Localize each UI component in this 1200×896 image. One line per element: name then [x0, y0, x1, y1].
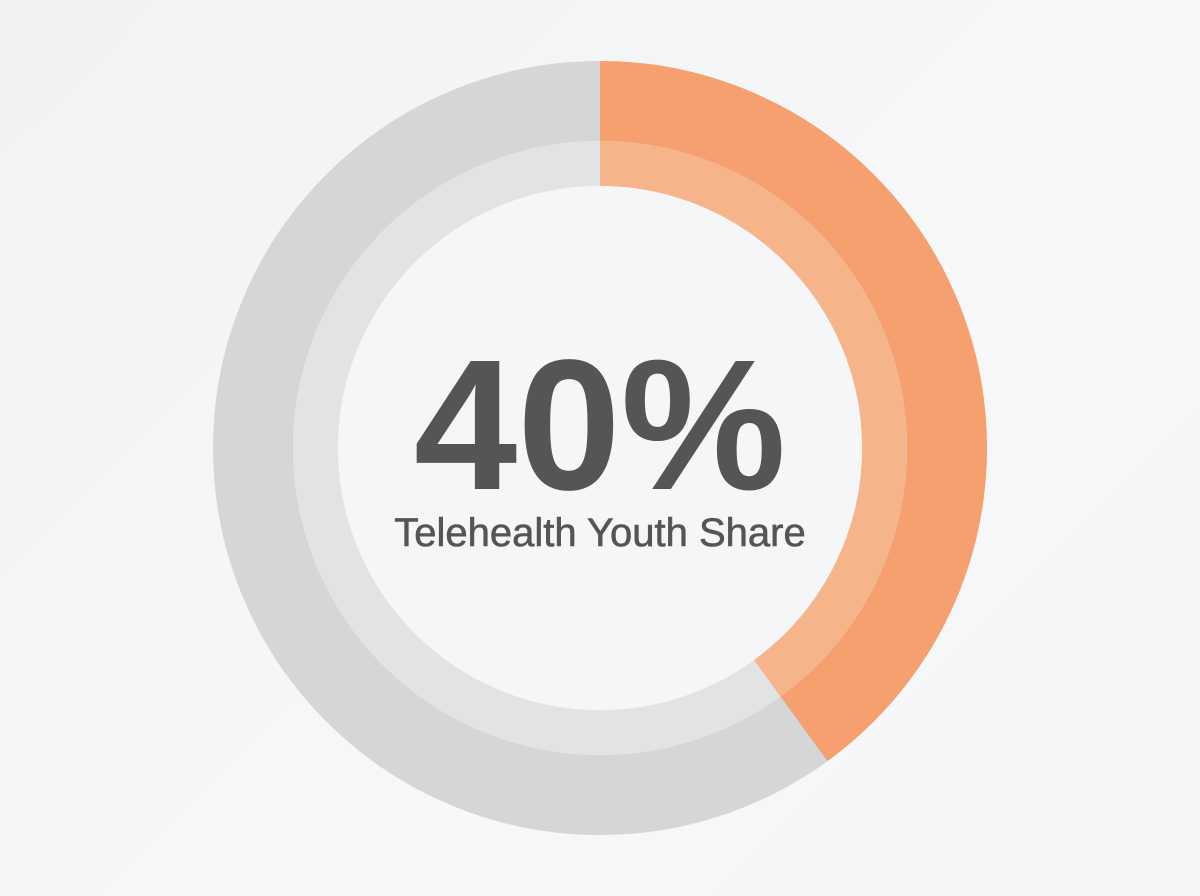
label: Telehealth Youth Share: [394, 511, 806, 555]
percentage value: 40%: [414, 322, 786, 529]
donut ring: inner band: [316, 164, 884, 732]
donut ring: outer band: [253, 101, 947, 795]
center disc: [338, 186, 862, 710]
